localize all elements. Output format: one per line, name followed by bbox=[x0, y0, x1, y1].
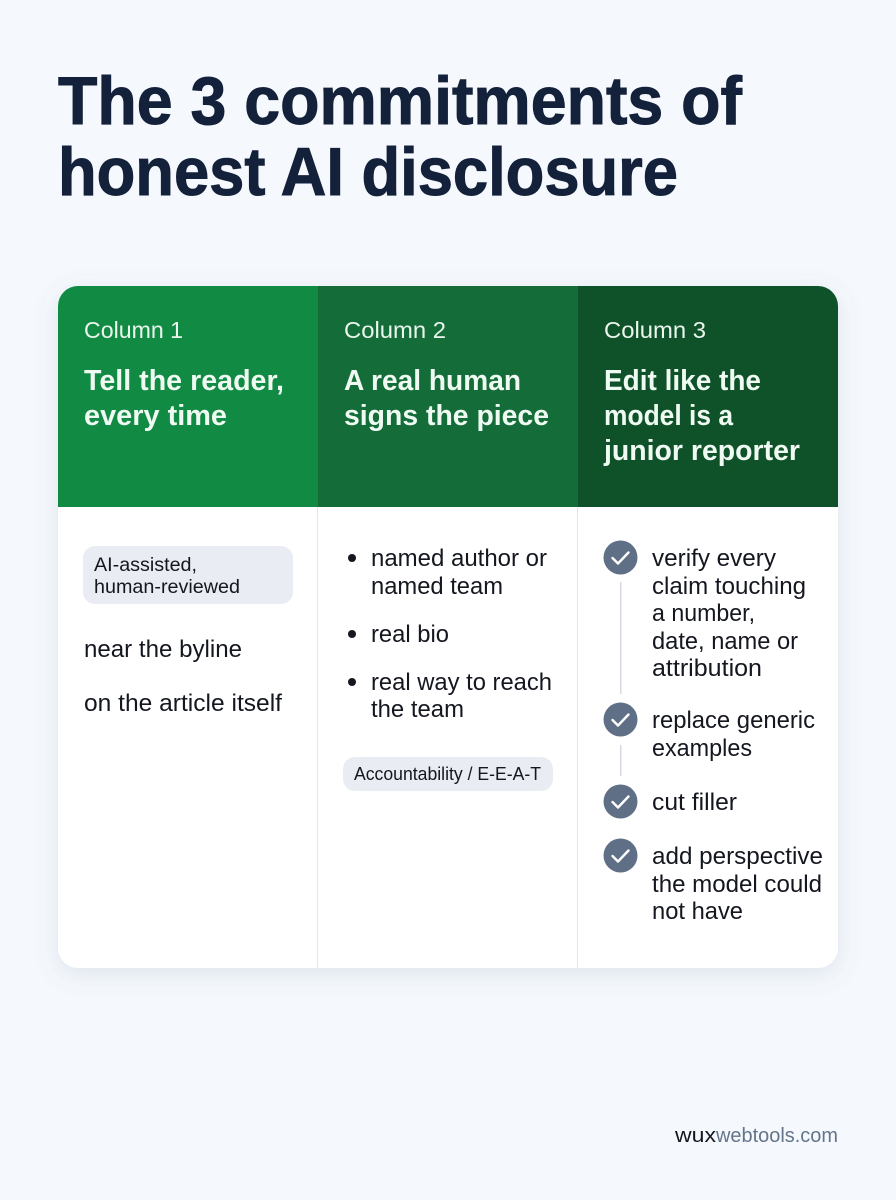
check item: add perspective: the model could bbox=[652, 871, 822, 898]
title: The 3 commitments of bbox=[58, 63, 742, 139]
title: honest AI disclosure bbox=[58, 134, 678, 210]
check item: add perspective bbox=[604, 838, 823, 925]
bullet: real way to reach the team: the team bbox=[371, 696, 464, 723]
column 3 header: junior reporter bbox=[603, 435, 800, 467]
comparison table card bbox=[58, 286, 838, 968]
check item: replace generic examples: replace generic bbox=[652, 707, 815, 734]
column 1 header: Column 1 bbox=[84, 317, 183, 343]
column 1 header: every time bbox=[84, 400, 227, 432]
placement: near the byline: near the byline bbox=[84, 636, 242, 663]
column 2 header: A real human bbox=[344, 365, 521, 397]
column 2 header: Column 2 bbox=[344, 317, 446, 343]
column 1 body bbox=[83, 546, 293, 717]
bullet: named author or named team: named team bbox=[371, 573, 503, 600]
bullet: named author or named team bbox=[348, 545, 547, 600]
check item: replace generic examples: examples bbox=[652, 735, 752, 762]
label chip: AI-assisted, human-reviewed: AI-assisted, bbox=[94, 554, 197, 576]
footer brand: webtools.com bbox=[715, 1125, 838, 1147]
bullet: named author or named team: named author or bbox=[371, 545, 547, 572]
check item: verify every claim bbox=[604, 540, 806, 682]
column 2 header: signs the piece bbox=[344, 400, 549, 432]
column 2 header bbox=[344, 317, 549, 432]
check item: verify every claim: a number, bbox=[652, 600, 755, 627]
bullet: real way to reach the team: real way to reach bbox=[371, 669, 552, 696]
column 3 header: Column 3 bbox=[604, 317, 706, 343]
column 1 header: Tell the reader, bbox=[84, 365, 284, 397]
column 3 header bbox=[603, 317, 800, 467]
check item: verify every claim: date, name or bbox=[652, 628, 798, 655]
column 3 body: checklist bbox=[604, 540, 823, 925]
label chip: AI-assisted, human-reviewed: human-reviewed bbox=[94, 576, 240, 598]
check item: verify every claim: claim touching bbox=[652, 573, 806, 600]
title bbox=[58, 63, 742, 210]
check item: add perspective: not have bbox=[652, 898, 743, 925]
check item: cut filler bbox=[604, 784, 737, 818]
placement: on the article itself: on the article itself bbox=[84, 690, 282, 717]
tag: Accountability / E-E-A-T: Accountability / E-E-A-T bbox=[354, 764, 541, 784]
check item: verify every claim: verify every bbox=[652, 545, 776, 572]
check item: verify every claim: attribution bbox=[652, 655, 762, 682]
column 3 header: Edit like the bbox=[604, 365, 761, 397]
column 3 header: model is a bbox=[604, 400, 734, 432]
check item: cut filler: cut filler bbox=[652, 789, 737, 816]
tag: Accountability / E-E-A-T bbox=[343, 757, 553, 791]
check item: add perspective: add perspective bbox=[652, 843, 823, 870]
column 1 header bbox=[84, 317, 284, 432]
label chip: AI-assisted, human-reviewed bbox=[83, 546, 293, 604]
bullet: real bio: real bio bbox=[371, 621, 449, 648]
bullet: real way to reach the team bbox=[348, 669, 552, 723]
column 2 body bbox=[343, 545, 553, 791]
check item: replace generic examples bbox=[604, 702, 815, 762]
footer brand: wux bbox=[674, 1125, 716, 1147]
